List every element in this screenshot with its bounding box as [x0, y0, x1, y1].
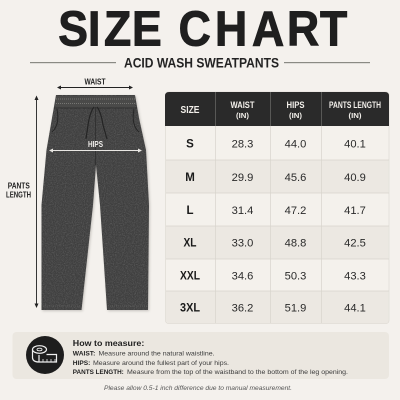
table header: PANTS LENGTH	[329, 100, 381, 111]
row L: 47.2	[285, 205, 306, 217]
pants illustration	[38, 92, 153, 314]
pants length instruction: PANTS LENGTH:	[73, 369, 124, 376]
pants length measurement: LENGTH	[6, 190, 31, 199]
row S	[186, 138, 366, 151]
row XL: 33.0	[232, 238, 253, 250]
row S: 28.3	[232, 138, 253, 150]
row L: 41.7	[344, 205, 366, 217]
hips instruction: HIPS:	[73, 360, 90, 367]
waist instruction: Measure around the natural waistline.	[98, 350, 215, 358]
row M: 40.9	[344, 172, 366, 184]
row XXL: 50.3	[285, 270, 306, 282]
hips measurement: HIPS	[88, 140, 104, 149]
row XL	[184, 238, 366, 250]
table rows background	[166, 92, 389, 324]
row 3XL: 3XL	[180, 303, 200, 315]
title: SIZECHART	[58, 0, 347, 56]
icon: measuring tape	[26, 336, 64, 374]
pants length instruction: Measure from the top of the waistband to the bottom of the leg opening.	[127, 369, 348, 376]
how to measure panel	[12, 332, 389, 379]
row L: 31.4	[232, 205, 253, 217]
how to measure heading: How to measure:	[73, 338, 144, 348]
row M	[185, 172, 366, 184]
row XL: 42.5	[344, 238, 366, 250]
hips measurement	[49, 140, 142, 152]
row XXL: 34.6	[232, 270, 253, 282]
row M: M	[185, 172, 195, 184]
drawstring	[86, 107, 107, 139]
row XL: 48.8	[285, 238, 306, 250]
footnote: Please allow 0.5-1 inch difference due to manual measurement.	[104, 386, 292, 392]
row L: L	[186, 205, 194, 217]
pants length measurement: PANTS	[8, 182, 30, 191]
row S: S	[186, 139, 194, 151]
hips instruction: Measure around the fullest part of your hips.	[93, 360, 229, 367]
waist instruction: WAIST:	[73, 350, 95, 358]
pants length measurement	[4, 96, 38, 308]
table header	[165, 92, 389, 126]
table header: (IN)	[236, 111, 250, 120]
row XXL: XXL	[180, 270, 200, 282]
row XXL: 43.3	[344, 270, 366, 282]
table header: (IN)	[348, 111, 362, 120]
row M: 29.9	[232, 172, 253, 184]
table header: WAIST	[230, 100, 255, 111]
row L	[186, 205, 366, 217]
row 3XL: 36.2	[232, 303, 253, 315]
row XL: XL	[184, 238, 196, 250]
row XXL	[180, 270, 366, 282]
table header: SIZE	[180, 105, 200, 116]
table header: (IN)	[289, 111, 303, 120]
row S: 40.1	[344, 138, 366, 150]
subtitle: ACID WASH SWEATPANTS	[124, 56, 279, 70]
waist measurement: WAIST	[84, 78, 106, 86]
waist measurement	[57, 78, 133, 90]
row 3XL	[180, 303, 366, 315]
size table	[165, 92, 389, 324]
row S: 44.0	[285, 138, 306, 150]
table header: HIPS	[286, 100, 304, 111]
row 3XL: 51.9	[285, 303, 306, 315]
row 3XL: 44.1	[344, 303, 366, 315]
row M: 45.6	[285, 172, 306, 184]
